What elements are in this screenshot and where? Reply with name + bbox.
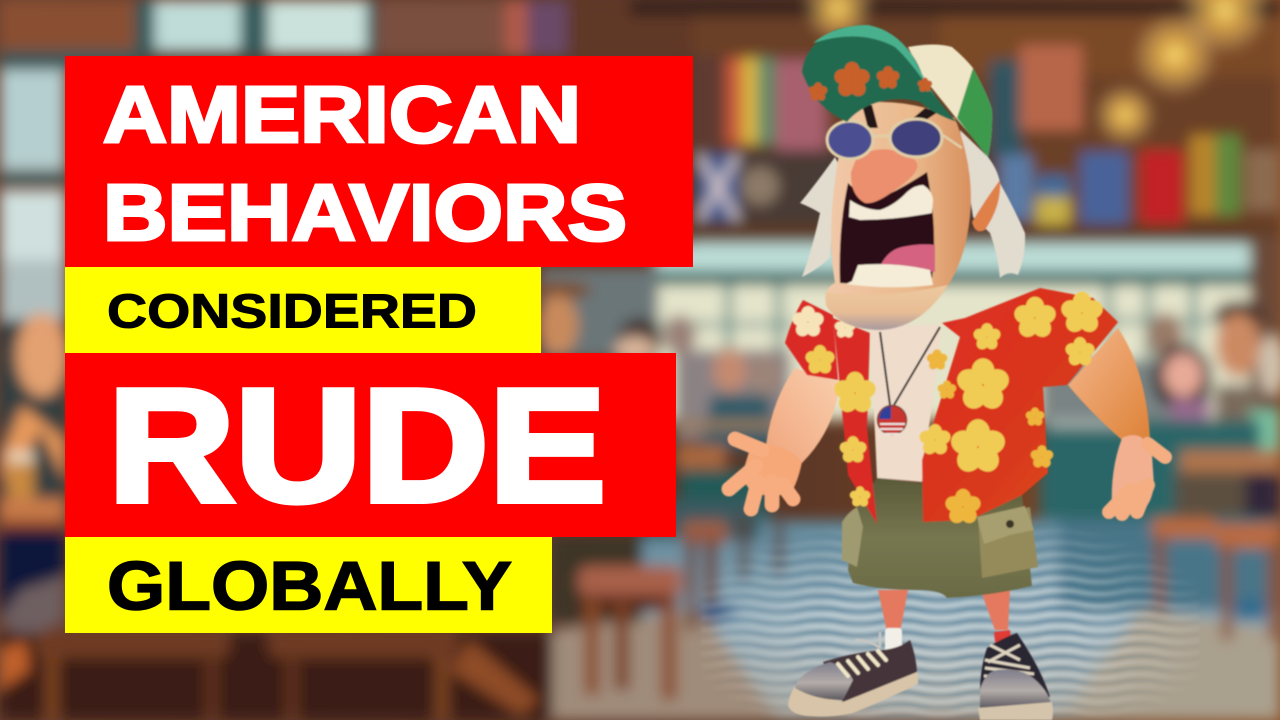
left shoe xyxy=(788,632,918,717)
heading: Considered: CONSIDERED xyxy=(107,286,477,338)
floor xyxy=(552,500,1280,720)
stools and tables xyxy=(552,510,1280,700)
cargo pockets xyxy=(842,506,1038,578)
upper left windows and frames xyxy=(0,0,697,290)
trucker cap xyxy=(802,25,992,157)
heading: Rude: RUDE xyxy=(108,356,606,536)
crowd on the right of the character xyxy=(1040,301,1280,520)
chin shading xyxy=(826,285,948,330)
left arm and open hand xyxy=(729,368,840,509)
hawaiian shirt xyxy=(785,288,1118,526)
shorts xyxy=(848,478,1032,598)
chest xyxy=(870,325,942,482)
heading: Behaviors: BEHAVIORS xyxy=(103,168,627,257)
crowd on the left of the character xyxy=(528,281,796,520)
patterned floor under the character xyxy=(702,530,1195,720)
sunglasses xyxy=(827,119,962,159)
shirt flowers xyxy=(791,292,1105,526)
red panel: Rude xyxy=(65,353,676,537)
right arm and open hand xyxy=(1068,328,1165,514)
title block xyxy=(65,56,693,633)
angry brows xyxy=(862,105,938,134)
heading: American: AMERICAN xyxy=(103,70,581,159)
bright window band behind the crowd xyxy=(541,235,1280,435)
ear xyxy=(972,180,1000,231)
legs xyxy=(878,590,1012,654)
hair xyxy=(800,130,1025,278)
yellow panel: Considered xyxy=(65,267,541,353)
necklace and flag medal xyxy=(878,327,940,434)
open mouth xyxy=(840,172,935,287)
right shoe xyxy=(978,633,1053,720)
head and jaw xyxy=(825,102,971,330)
yellow panel: Globally xyxy=(65,537,552,633)
back wall with bunting flags xyxy=(630,0,1280,243)
red panel: American Behaviors xyxy=(65,56,693,267)
nose xyxy=(851,149,918,203)
left foreground patron and table xyxy=(0,260,552,720)
heading: Globally: GLOBALLY xyxy=(107,548,512,624)
character: shouting tourist xyxy=(729,25,1165,720)
